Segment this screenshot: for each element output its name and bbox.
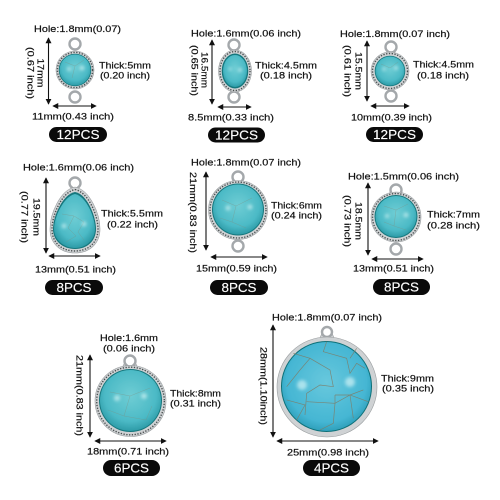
- width arrow: [372, 258, 423, 260]
- icon: connector charm: [208, 172, 268, 252]
- height label: [25, 47, 46, 99]
- height label: 19.5mm: [31, 198, 42, 236]
- width label: 10mm(0.39 inch): [351, 112, 432, 124]
- hole size label: Hole:1.6mm: [100, 333, 158, 344]
- width arrow: [218, 106, 251, 108]
- quantity pill: [45, 280, 103, 295]
- thickness label: (0.22 inch): [107, 220, 158, 230]
- thickness label: (0.31 inch): [170, 398, 221, 410]
- quantity pill: 8PCS: [56, 281, 92, 295]
- width arrow: [53, 105, 96, 107]
- thickness label: Thick:8mm: [170, 388, 221, 400]
- width arrow: [277, 440, 378, 442]
- height label: (0.67 inch): [25, 47, 36, 99]
- thickness label: Thick:7mm: [427, 210, 480, 220]
- thickness label: [271, 200, 322, 222]
- height label: [342, 195, 364, 247]
- thickness label: (0.20 inch): [100, 70, 150, 82]
- width label: 13mm(0.51 inch): [35, 264, 116, 276]
- height arrow: [367, 183, 369, 255]
- quantity pill: 4PCS: [314, 462, 349, 476]
- height label: 18.5mm: [353, 202, 364, 240]
- thickness label: (0.28 inch): [427, 220, 480, 232]
- height arrow: [205, 172, 207, 250]
- quantity pill: 12PCS: [215, 128, 258, 142]
- height label: 16.5mm: [199, 52, 210, 88]
- width label: 15mm(0.59 inch): [196, 264, 277, 274]
- quantity pill: 12PCS: [373, 128, 416, 142]
- width label: 18mm(0.71 inch): [87, 446, 169, 458]
- height label: (0.61 inch): [342, 45, 353, 97]
- height arrow: [45, 178, 47, 253]
- quantity pill: 12PCS: [56, 128, 100, 142]
- width label: 8.5mm(0.33 inch): [188, 112, 274, 124]
- width arrow: [211, 256, 267, 258]
- height arrow: [89, 355, 91, 437]
- width label: 13mm(0.51 inch): [353, 264, 434, 274]
- panel: 25mm large pendant: [258, 312, 434, 476]
- height label: [189, 45, 210, 96]
- width label: 11mm(0.43 inch): [32, 112, 114, 122]
- icon: connector charm: [371, 42, 409, 102]
- thickness label: Thick:5.5mm: [101, 208, 163, 220]
- height label: 17mm: [35, 58, 46, 88]
- panel: 8.5mm oval connector: [188, 28, 317, 142]
- hole size label: Hole:1.8mm(0.07 inch): [191, 158, 301, 168]
- hole size label: Hole:1.8mm(0.07 inch): [340, 29, 450, 40]
- icon: oval connector charm: [218, 40, 252, 102]
- thickness label: Thick:5mm: [99, 60, 151, 72]
- height arrow: [48, 38, 50, 104]
- thickness label: [381, 374, 434, 394]
- height label: (0.77 inch): [19, 191, 30, 243]
- panel: teardrop pendant: [19, 162, 163, 295]
- height label: (0.65 inch): [189, 45, 200, 96]
- thickness label: Thick:6mm: [271, 200, 322, 212]
- hole size label: [100, 333, 158, 354]
- icon: pendant charm: [95, 356, 166, 436]
- thickness label: [427, 210, 480, 232]
- panel: 15mm round connector: [187, 158, 322, 295]
- thickness label: [101, 208, 163, 230]
- height arrow: [211, 40, 213, 104]
- thickness label: [413, 60, 474, 82]
- height label: 15.5mm: [353, 52, 364, 90]
- hole size label: Hole:1.6mm(0.06 inch): [23, 162, 134, 174]
- thickness label: [99, 60, 151, 82]
- hole size label: (0.06 inch): [103, 344, 155, 354]
- height label: 28mm(1.10inch): [258, 347, 269, 425]
- width arrow: [95, 440, 166, 442]
- height arrow: [272, 325, 274, 437]
- icon: connector charm: [56, 38, 94, 102]
- thickness label: (0.24 inch): [271, 210, 322, 222]
- height label: [342, 45, 364, 97]
- icon: connector charm: [371, 184, 421, 254]
- thickness label: Thick:4.5mm: [413, 60, 474, 70]
- thickness label: (0.18 inch): [260, 70, 312, 82]
- thickness label: (0.35 inch): [382, 384, 434, 394]
- hole size label: Hole:1.6mm(0.06 inch): [191, 28, 301, 40]
- hole size label: Hole:1.8mm(0.07 inch): [272, 312, 382, 324]
- hole size label: Hole:1.8mm(0.07): [34, 24, 121, 35]
- icon: large cracked pendant: [277, 327, 377, 437]
- panel: 10mm round connector: [340, 29, 474, 142]
- panel: 13mm round connector: [342, 172, 480, 295]
- panel: 18mm round pendant: [74, 333, 221, 476]
- thickness label: (0.18 inch): [417, 70, 469, 82]
- hole size label: Hole:1.5mm(0.06 inch): [348, 172, 459, 182]
- quantity pill: 6PCS: [114, 462, 149, 476]
- height label: (0.73 inch): [342, 195, 353, 247]
- height arrow: [366, 41, 368, 101]
- icon: teardrop charm: [50, 178, 100, 253]
- quantity pill: 8PCS: [222, 281, 256, 295]
- width arrow: [49, 255, 100, 257]
- height label: 21mm(0.83 inch): [187, 172, 198, 253]
- quantity pill: 8PCS: [384, 280, 419, 294]
- quantity pill: [103, 460, 160, 476]
- thickness label: [170, 388, 221, 410]
- thickness label: Thick:9mm: [381, 374, 434, 384]
- width label: 25mm(0.98 inch): [287, 448, 369, 458]
- width arrow: [371, 105, 409, 107]
- height label: 21mm(0.83 inch): [74, 355, 85, 436]
- thickness label: [255, 60, 317, 82]
- height label: [19, 191, 42, 243]
- quantity pill: [303, 460, 360, 476]
- panel: 11mm round connector: [25, 24, 151, 142]
- thickness label: Thick:4.5mm: [255, 60, 317, 72]
